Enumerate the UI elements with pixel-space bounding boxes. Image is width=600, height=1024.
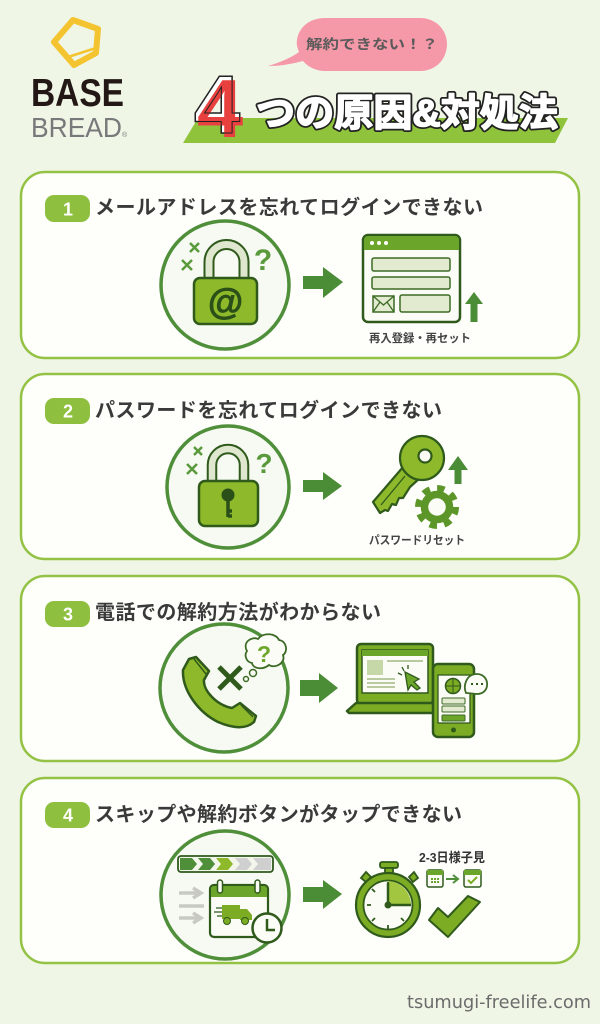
- footer url: tsumugi-freelife.com: [407, 992, 591, 1013]
- logo text: BREAD: BREAD: [31, 112, 122, 143]
- panel: cause 4: [21, 778, 579, 963]
- arrow 4: [303, 880, 342, 909]
- title numeral 4: 4: [194, 58, 240, 151]
- icon: signup form window: [363, 235, 483, 322]
- icon: check mark: [429, 896, 480, 937]
- logo text: BASE: BASE: [31, 72, 124, 115]
- badge 2: 2: [63, 402, 73, 422]
- title numeral 4: 4: [194, 58, 240, 151]
- logo: BASE BREAD: [31, 20, 128, 143]
- label: 2-3 days: 2-3日様子見: [419, 850, 485, 865]
- title text: つの原因&対処法: [256, 93, 558, 135]
- icon: phone with question: ?: [257, 641, 271, 667]
- speech bubble: 解約できない！？: [306, 36, 438, 52]
- arrow 1: [303, 267, 343, 298]
- title green bar: [183, 118, 568, 143]
- icon: smartphone: [433, 664, 487, 737]
- heading 4: スキップや解約ボタンがタップできない: [95, 802, 462, 826]
- title text: つの原因&対処法: [256, 93, 558, 135]
- arrow 2: [303, 472, 342, 500]
- heading 2: パスワードを忘れてログインできない: [95, 398, 442, 422]
- badge 1: 1: [63, 200, 73, 220]
- icon: yellow pentagon: [54, 20, 98, 65]
- badge 4: [45, 802, 90, 828]
- icon: delivery calendar: [161, 831, 289, 959]
- registered mark: ®: [122, 131, 128, 139]
- badge 3: 3: [63, 604, 73, 624]
- title: [183, 58, 568, 155]
- icon: laptop: [347, 644, 434, 713]
- icon: lock with key hole: [167, 426, 289, 548]
- badge 3: [45, 601, 90, 627]
- caption 1: 再入登録・再セット: [369, 331, 471, 345]
- arrow 3: [300, 673, 338, 703]
- icon: gear: [418, 488, 456, 526]
- badge 2: [45, 398, 90, 424]
- heading 3: 電話での解約方法がわからない: [95, 600, 381, 624]
- icon: locked with at sign: ?: [254, 244, 272, 277]
- badge 1: [45, 195, 90, 222]
- badge 4: 4: [63, 806, 73, 826]
- icon: calendars with arrow: [427, 870, 481, 887]
- icon: stopwatch: [356, 862, 420, 937]
- icon: key: [373, 436, 444, 513]
- panel: cause 3: [21, 576, 579, 761]
- speech bubble: [268, 18, 447, 71]
- caption 2: パスワードリセット: [369, 534, 465, 547]
- icon: locked with at sign: [161, 221, 289, 349]
- icon: locked with at sign: @: [208, 281, 243, 322]
- panel: cause 2: [21, 374, 579, 559]
- icon: lock with key hole: ?: [255, 448, 273, 479]
- panel: cause 1: [21, 172, 579, 358]
- title numeral 4: 4: [197, 62, 243, 155]
- heading 1: メールアドレスを忘れてログインできない: [95, 195, 483, 219]
- icon: phone with question: [160, 624, 288, 752]
- up arrow 2: [448, 456, 468, 484]
